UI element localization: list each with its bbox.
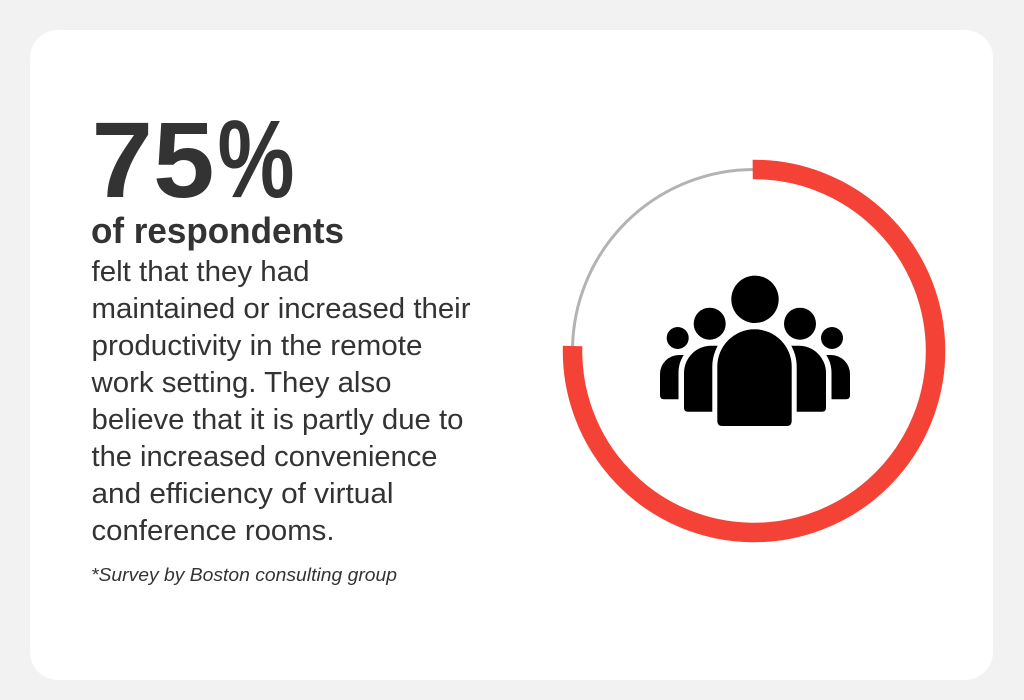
body text block: and efficiency of virtual [92,478,394,510]
headline statistic: 75% [92,98,294,221]
body text block: felt that they had [92,256,310,288]
icon: group of people [660,276,850,426]
body text block [90,256,471,547]
body text block: maintained or increased their [92,293,471,325]
body text block: the increased convenience [92,441,437,473]
outer right person [815,327,850,399]
subheading: of respondents: of respondents [91,210,344,251]
body text block: believe that it is partly due to [92,404,464,436]
highlighted 75 percent arc [573,169,936,532]
body text block: work setting. They also [90,367,392,399]
headline statistic: 75%: 75 [92,99,214,220]
remaining 25 percent arc [572,170,754,348]
inner right person [775,308,826,412]
body text block: conference rooms. [92,515,334,547]
donut chart: 75 percent [572,169,936,532]
outer left person [660,327,695,399]
inner left person [684,308,735,412]
center person [717,276,792,426]
headline statistic: 75%: % [218,98,294,221]
body text block: productivity in the remote [92,330,422,362]
footnote: survey source: *Survey by Boston consulting group [91,564,397,585]
